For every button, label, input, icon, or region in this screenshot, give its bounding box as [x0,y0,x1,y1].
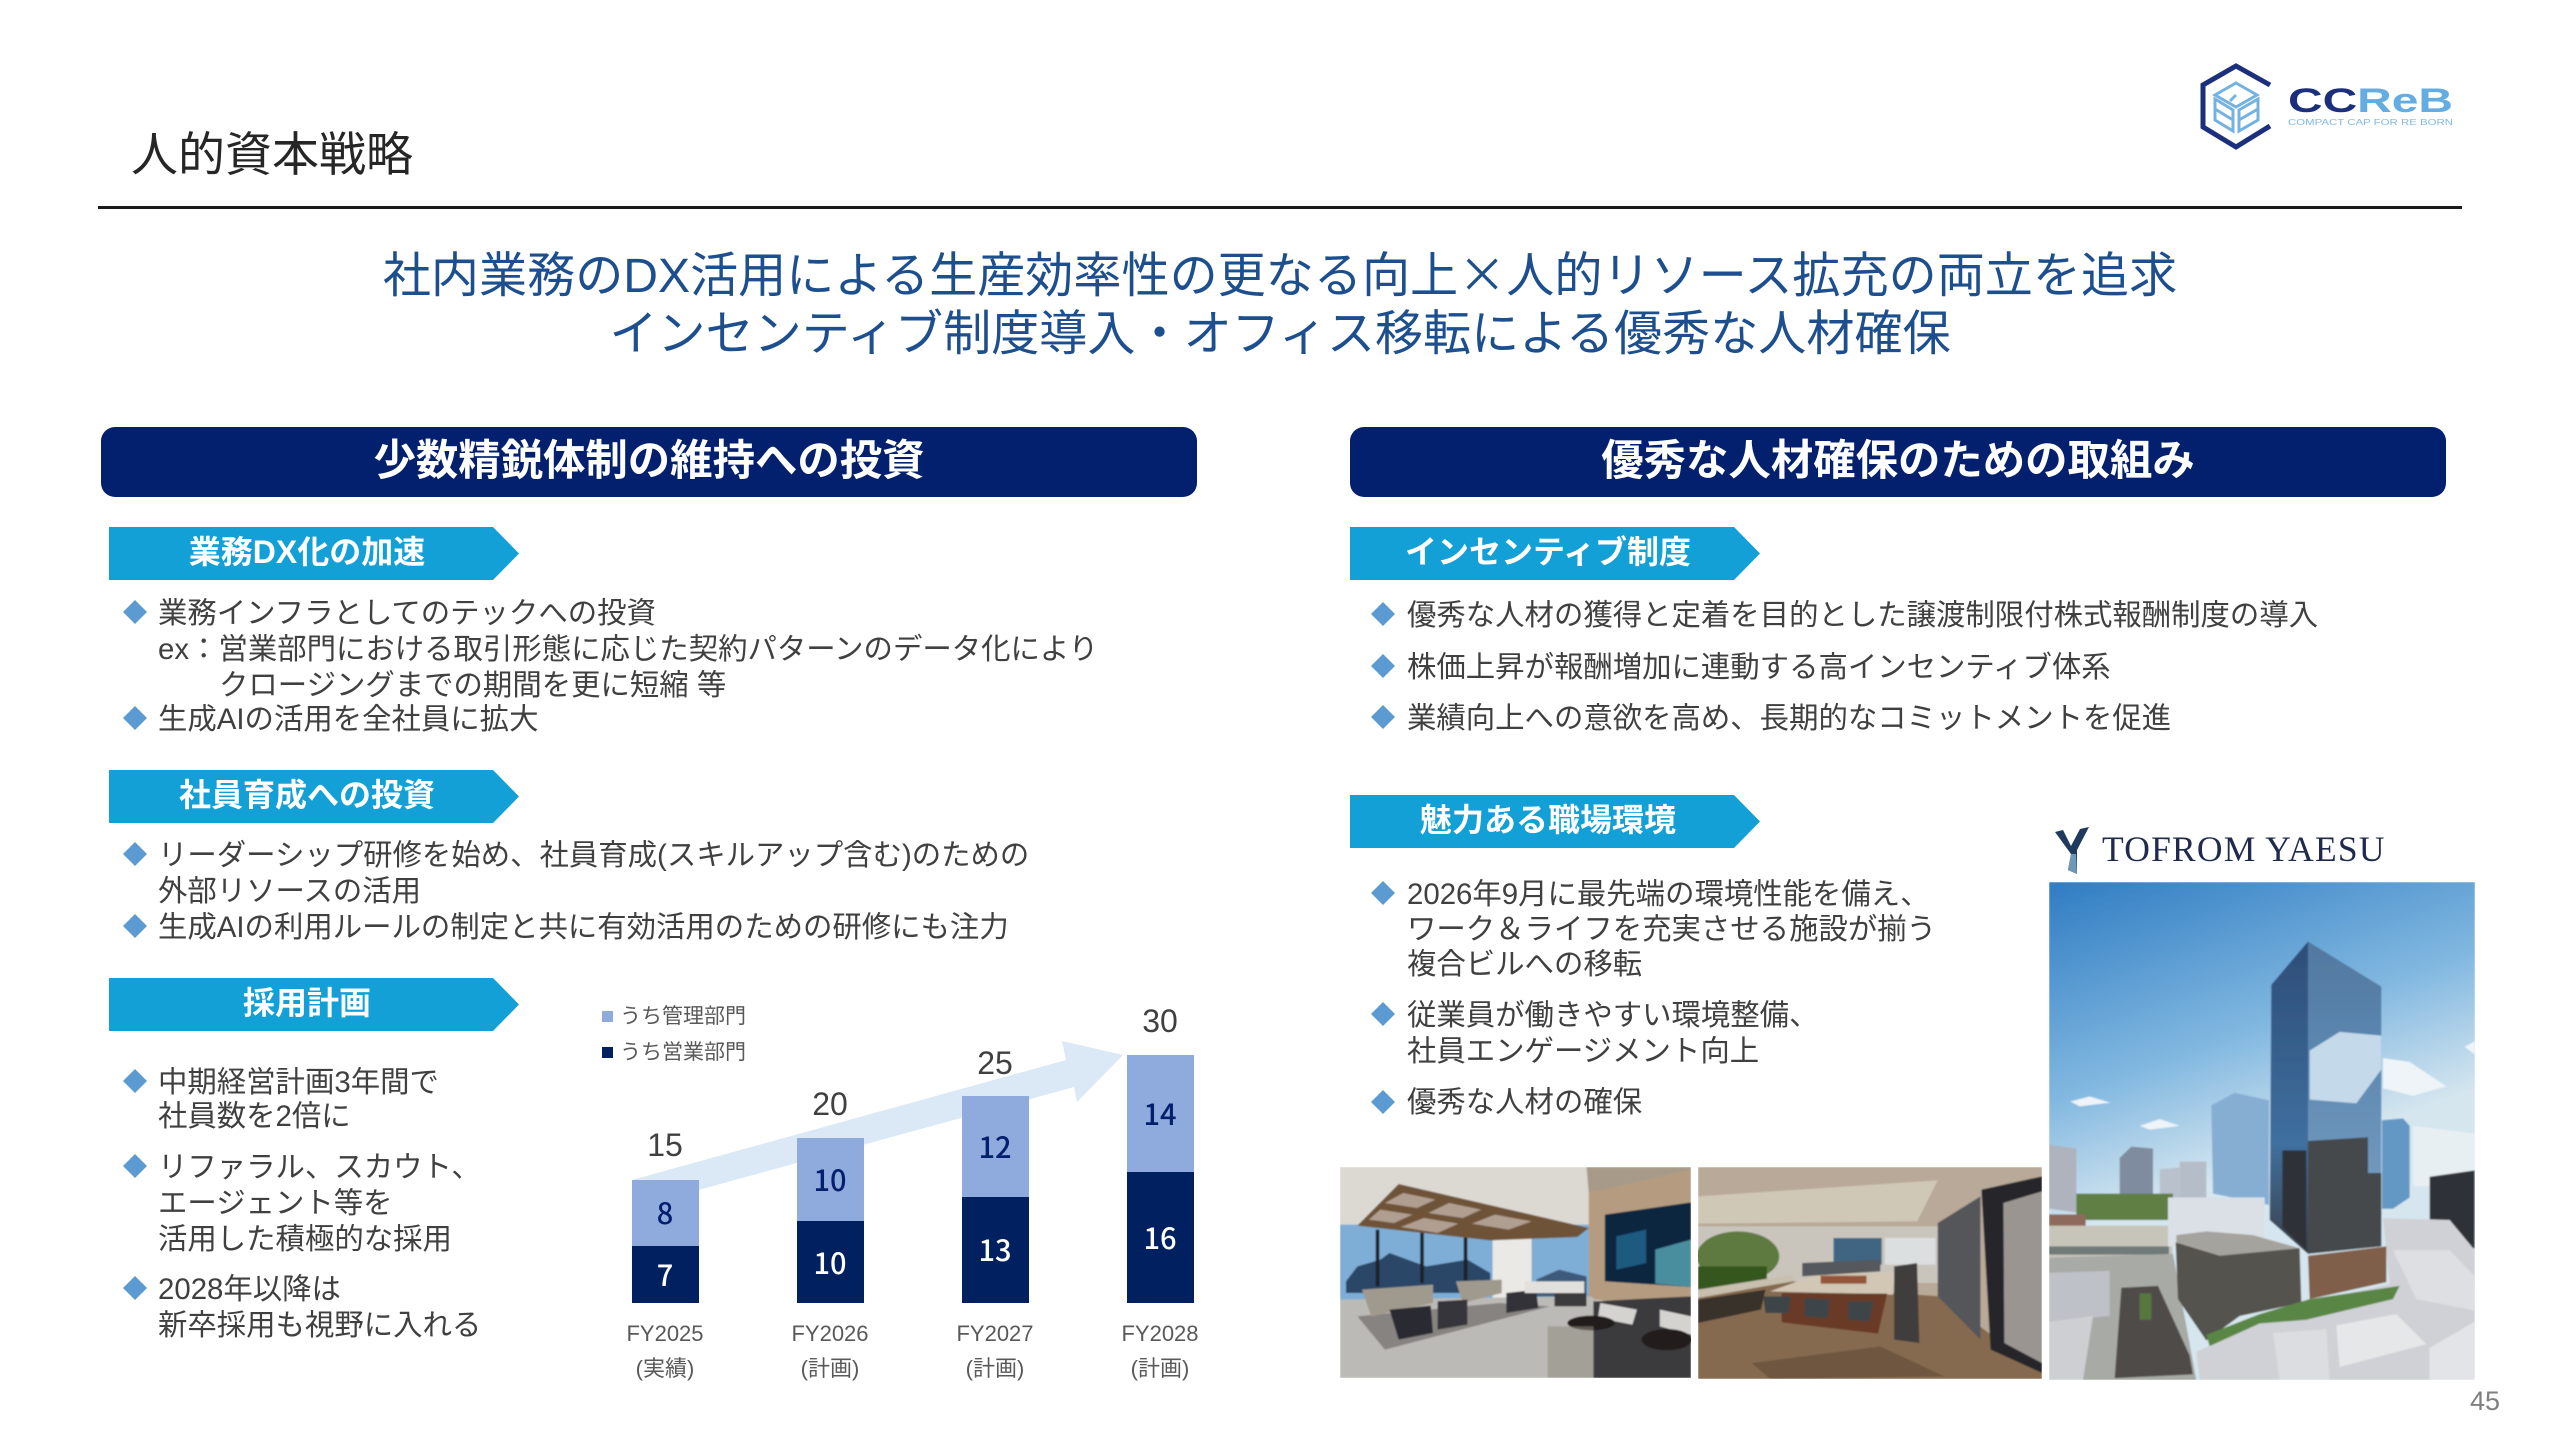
axis labels [626,1321,1199,1381]
bar chart: headcount plan [602,1003,1199,1381]
text block: 採用計画: 活用した積極的な採用 [158,1223,452,1256]
axis labels: (実績) [636,1356,694,1381]
text block: 社員育成への投資: 外部リソースの活用 [158,875,421,908]
axis labels: (計画) [966,1356,1024,1381]
text block: 魅力ある職場環境: 優秀な人材の確保 [1407,1086,1642,1119]
totals: 20 [812,1086,848,1122]
text block: インセンティブ制度: 業績向上への意欲を高め、長期的なコミットメントを促進 [1407,702,2171,735]
bar values: 10 [813,1158,847,1200]
bar values: 12 [978,1125,1012,1167]
text block: 業務DX化の加速: 生成AIの活用を全社員に拡大 [158,703,538,736]
text block: 魅力ある職場環境: 複合ビルへの移転 [1407,948,1642,981]
bar values: 16 [1143,1216,1177,1258]
panel heading: left: 少数精鋭体制の維持への投資 [373,437,925,484]
totals [647,1003,1178,1163]
section tag: 社員育成への投資 [109,770,519,823]
bar values [657,1092,1177,1295]
text block: 魅力ある職場環境: 従業員が働きやすい環境整備、 [1407,999,1818,1032]
section tag: 社員育成への投資: 社員育成への投資 [179,777,435,813]
text block: 採用計画: 中期経営計画3年間で [158,1066,439,1099]
arrow: growth trend [632,1041,1123,1206]
logo: CCReB [2200,63,2453,150]
text block: 社員育成への投資: リーダーシップ研修を始め、社員育成(スキルアップ含む)のための [158,839,1029,872]
text block: 採用計画 [123,1066,481,1342]
text block: インセンティブ制度: 株価上昇が報酬増加に連動する高インセンティブ体系 [1407,651,2111,684]
icon: hexagon cube [2203,66,2270,147]
logo: CCReB: CC ReB [2288,82,2453,120]
bar values: 10 [813,1241,847,1283]
bar values: 14 [1143,1092,1177,1134]
headline: インセンティブ制度導入・オフィス移転による優秀な人材確保 [609,307,1951,361]
headline [383,236,2177,361]
headline: 社内業務のDX活用による生産効率性の更なる向上×人的リソース拡充の両立を追求 [383,236,2177,306]
totals: 15 [647,1127,683,1163]
axis labels: FY2028 [1121,1321,1199,1346]
axis labels: FY2027 [956,1321,1034,1346]
section tag: 業務DX化の加速 [109,527,519,580]
text block: 業務DX化の加速: ex：営業部門における取引形態に応じた契約パターンのデータ化により [158,633,1098,666]
text block: 社員育成への投資: 生成AIの利用ルールの制定と共に有効活用のための研修にも注力 [158,911,1009,944]
section tag: 魅力ある職場環境 [1350,795,1760,848]
logo: CCReB: COMPACT CAP FOR RE BORN [2288,117,2453,127]
text block: 採用計画: リファラル、スカウト、 [158,1151,481,1184]
text block: 業務DX化の加速 [123,597,1098,736]
axis labels: (計画) [1131,1356,1189,1381]
axis labels: (計画) [801,1356,859,1381]
text block: 採用計画: 社員数を2倍に [158,1100,351,1133]
axis labels: FY2025 [626,1321,704,1346]
section tag: 業務DX化の加速: 業務DX化の加速 [189,534,425,570]
totals: 25 [977,1045,1013,1081]
legend [602,1005,746,1064]
section tag: インセンティブ制度 [1350,527,1760,580]
text block: 採用計画: エージェント等を [158,1187,393,1220]
section tag: インセンティブ制度: インセンティブ制度 [1405,534,1691,570]
text block: 社員育成への投資 [123,839,1029,944]
bars [632,1055,1194,1303]
text block: 魅力ある職場環境: 社員エンゲージメント向上 [1407,1035,1759,1068]
text block: 採用計画: 新卒採用も視野に入れる [158,1309,481,1342]
totals: 30 [1142,1003,1178,1039]
text block: インセンティブ制度: 優秀な人材の獲得と定着を目的とした譲渡制限付株式報酬制度の導入 [1407,599,2318,632]
legend: うち営業部門 [620,1041,746,1064]
text block: 魅力ある職場環境: 2026年9月に最先端の環境性能を備え、 [1407,878,1930,911]
text block: インセンティブ制度 [1371,599,2318,735]
section tag: 採用計画: 採用計画 [243,985,371,1021]
photo: cafe counter interior [1698,1167,2042,1379]
bar values: 8 [657,1191,673,1233]
bar values: 7 [657,1253,673,1295]
photo: lounge interior [1340,1167,1691,1378]
legend: うち管理部門 [620,1005,746,1028]
logo: TOFROM YAESU: TOFROM YAESU [2102,829,2386,869]
text block: 魅力ある職場環境: ワーク＆ライフを充実させる施設が揃う [1407,913,1936,946]
text block: 業務DX化の加速: 業務インフラとしてのテックへの投資 [158,597,656,630]
page number: 45 [2470,1386,2500,1416]
axis labels: FY2026 [791,1321,869,1346]
icon: Y mark [2055,827,2089,874]
photo: TOFROM YAESU tower [2049,882,2475,1380]
title: 人的資本戦略 [131,128,413,181]
panel heading: right [1350,427,2446,497]
panel heading: left [101,427,1197,497]
text block: 魅力ある職場環境 [1371,878,1936,1119]
panel heading: right: 優秀な人材確保のための取組み [1601,437,2195,484]
text block: 業務DX化の加速: クロージングまでの期間を更に短縮 等 [219,669,726,702]
text block: 採用計画: 2028年以降は [158,1273,341,1306]
section tag: 採用計画 [109,978,519,1031]
bar values: 13 [978,1228,1012,1270]
section tag: 魅力ある職場環境: 魅力ある職場環境 [1420,802,1676,838]
